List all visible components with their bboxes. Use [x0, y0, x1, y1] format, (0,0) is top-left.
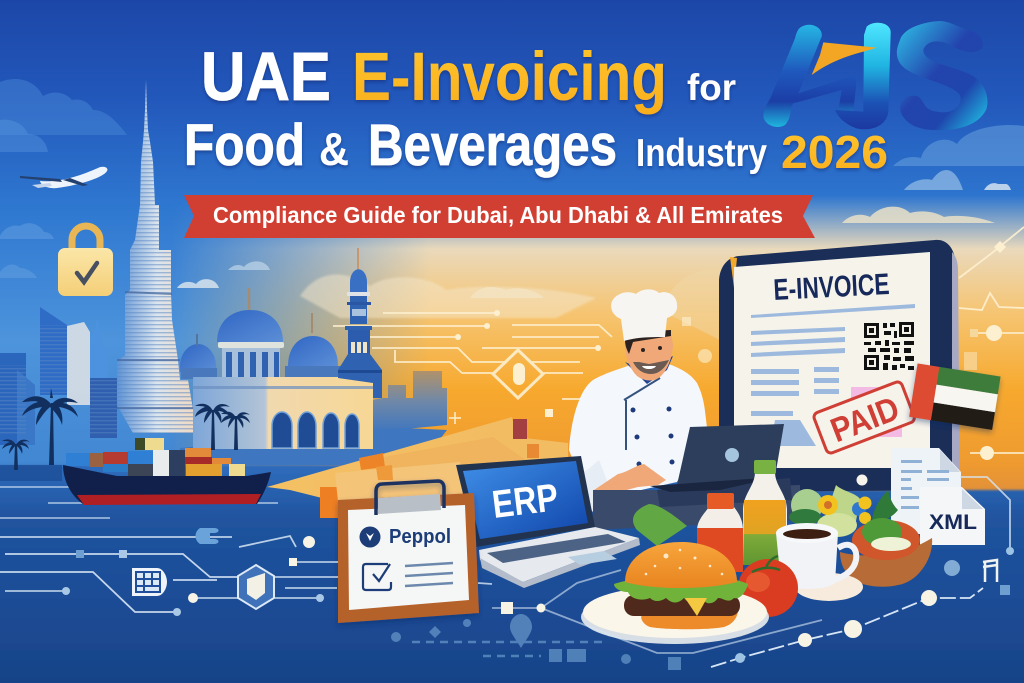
circuit lines on sunset: [333, 227, 1024, 453]
counter: [593, 485, 800, 530]
buttons: [630, 406, 674, 466]
ERP laptop: [456, 456, 640, 588]
food: bowl with dish: [840, 518, 932, 587]
Peppol logo and label: [360, 526, 451, 548]
Peppol clipboard: [338, 481, 479, 623]
Burj Khalifa tower: [117, 80, 197, 433]
title line 2: 2026: [781, 126, 888, 178]
icon: airplane: [20, 167, 107, 188]
PAID stamp: PAID: [826, 390, 905, 450]
title line 1: UAE: [201, 38, 331, 115]
chef body: [569, 361, 707, 502]
XML label: XML: [929, 511, 977, 534]
UAE flag: [909, 363, 1001, 430]
icon: padlock with check: [58, 226, 113, 296]
clouds: [0, 79, 1024, 350]
title line 1: [201, 38, 736, 115]
circuit nodes on sunset: [449, 241, 1006, 460]
invoice paper: [734, 252, 930, 468]
tablet with e-invoice: [719, 240, 1001, 492]
chef working at laptop: [569, 289, 800, 530]
Peppol logo and label: Peppol: [389, 526, 451, 548]
food: coffee cup on saucer: [776, 523, 863, 601]
title line 1: for: [687, 67, 736, 108]
invoice text lines: [751, 304, 915, 446]
palm trees: [2, 388, 250, 470]
dark laptop: [650, 424, 784, 492]
food: salad greens: [789, 485, 898, 537]
letter S: [897, 21, 987, 130]
ERP label: ERP: [490, 476, 561, 527]
diamond node: [493, 350, 543, 398]
food: orange juice bottle: [743, 460, 787, 565]
gold swoosh: [812, 42, 877, 75]
chef hat: [611, 289, 677, 341]
network nodes: [62, 536, 1014, 670]
water highlight lines: [0, 487, 278, 518]
title line 2: [184, 113, 888, 178]
mosque wall: [193, 377, 373, 449]
hexagon icon: [238, 565, 274, 609]
title line 2: Food: [184, 113, 305, 178]
cargo ship with containers: [63, 438, 271, 505]
main dome: [217, 288, 284, 378]
food: burger on plate: [581, 504, 769, 644]
chef face: [625, 334, 673, 380]
right dome: [285, 313, 341, 378]
text lines: [405, 563, 453, 586]
orange folders and ground plane: [267, 417, 568, 520]
mosque: [180, 248, 382, 449]
title line 1: E-Invoicing: [352, 38, 667, 115]
pink sticky note: [851, 387, 902, 437]
minaret: [338, 248, 382, 398]
AJS logo: [763, 21, 987, 130]
chef arm and hand: [569, 460, 609, 512]
subtitle ribbon: Compliance Guide for Dubai, Abu Dhabi & All Emirates: [213, 202, 783, 228]
QR code: [864, 322, 914, 370]
letter A: [763, 25, 856, 127]
chip icon: [132, 568, 167, 596]
title: [184, 38, 888, 178]
arches: [272, 412, 359, 448]
title line 2: Industry: [636, 132, 767, 175]
check box icon: [363, 564, 391, 590]
title line 2: &: [319, 123, 349, 175]
food: red sauce bottle: [697, 493, 743, 572]
lower circuit network: [0, 477, 1010, 667]
plug icon: [196, 528, 218, 544]
XML document icons: [891, 448, 985, 545]
skyline buildings: [0, 307, 117, 445]
title line 2: Beverages: [368, 113, 617, 178]
heading: e-invoice: E-INVOICE: [773, 268, 890, 307]
distant city silhouette behind mosque: [180, 371, 447, 465]
subtitle ribbon: [184, 195, 815, 238]
food: tomato: [738, 556, 798, 617]
letter J: [835, 23, 891, 129]
left dome: [180, 334, 216, 372]
